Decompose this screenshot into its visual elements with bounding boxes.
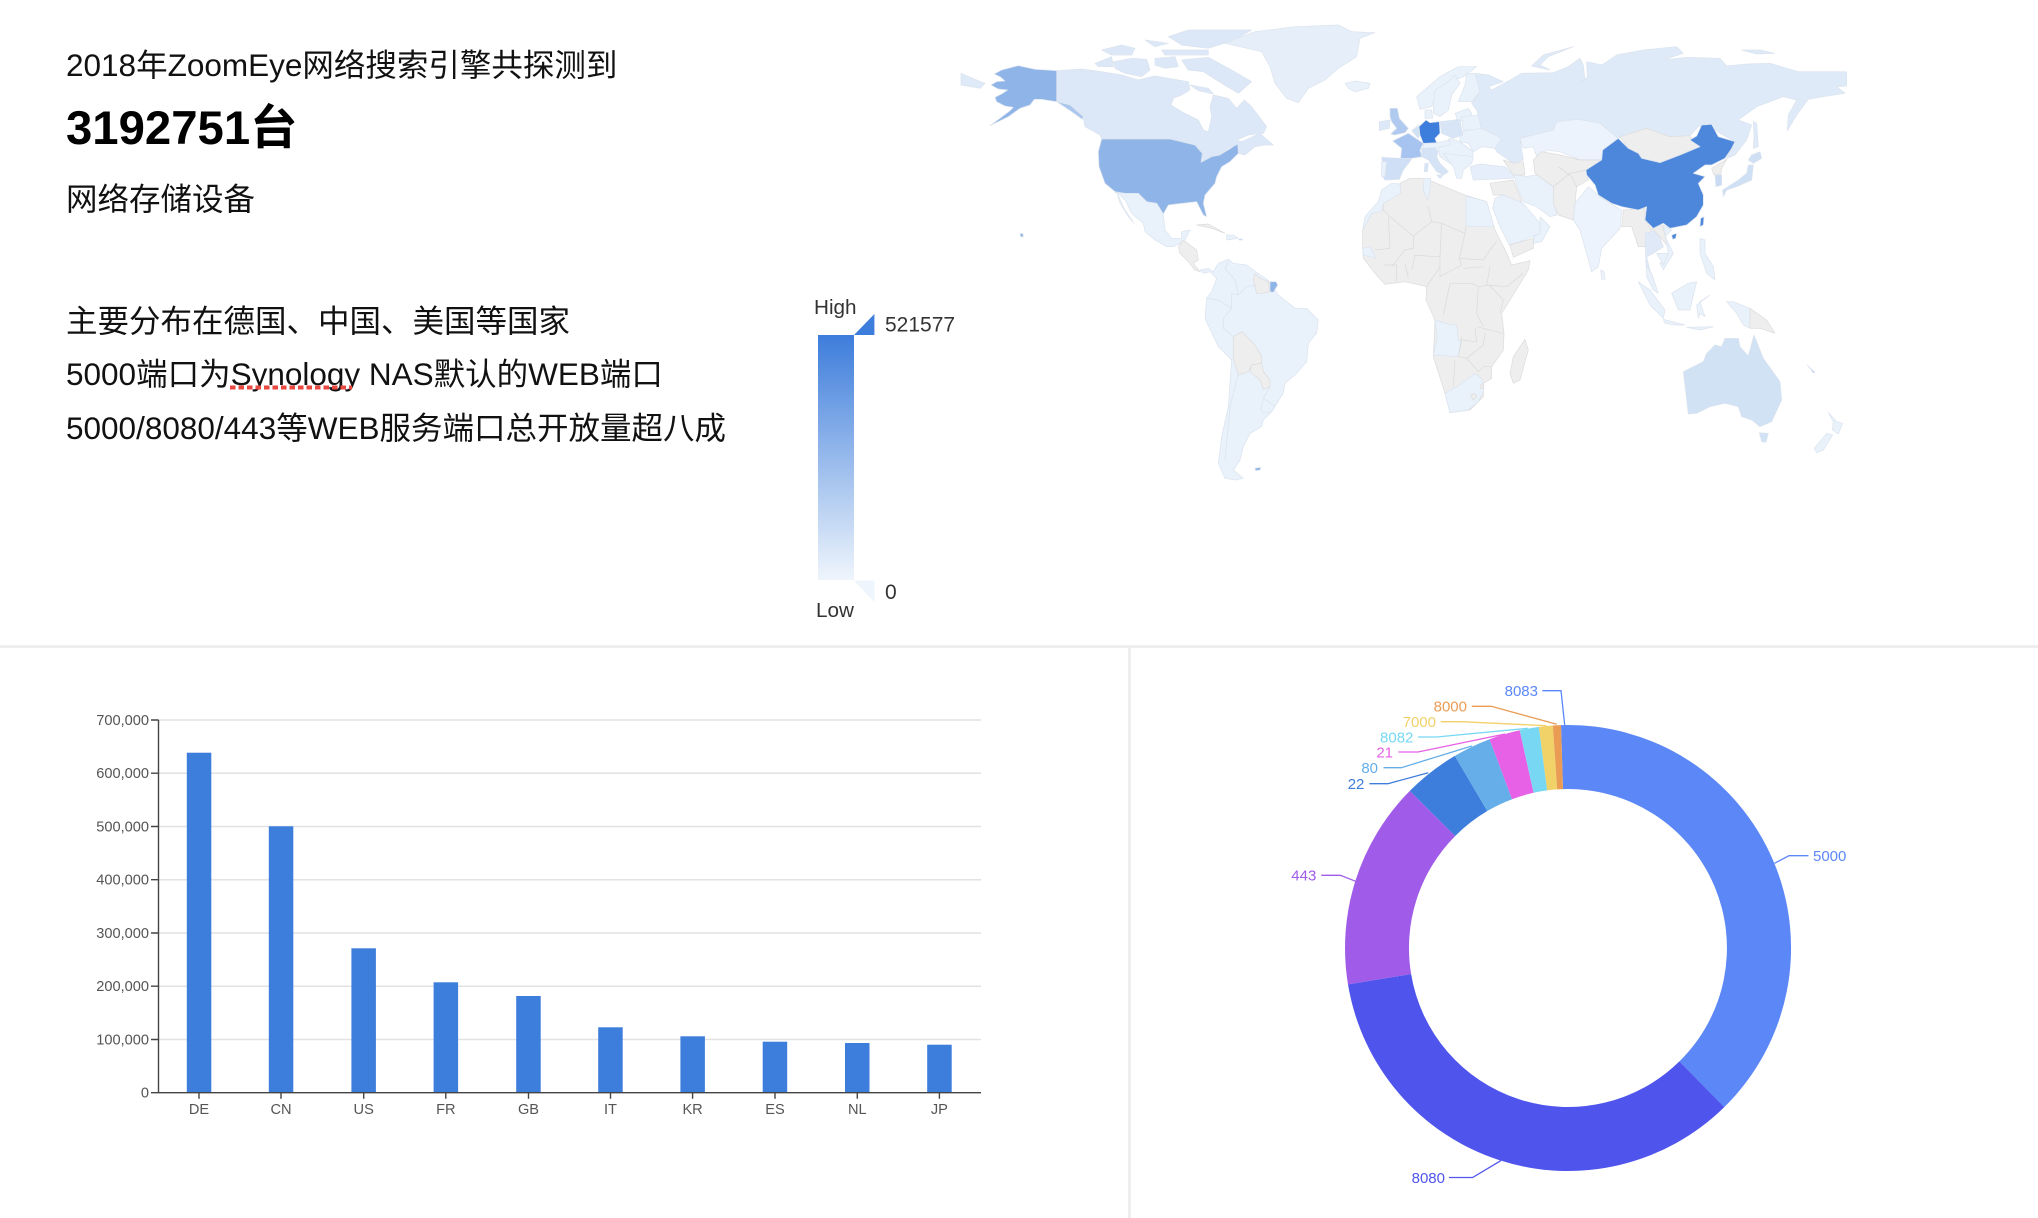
bar chart axes	[151, 720, 981, 1099]
legend gradient bar	[818, 335, 854, 580]
text: synology port note: 5000端口为Synology NAS默认的WEB端口	[66, 356, 663, 392]
label 8082: 8082	[1380, 729, 1413, 746]
country: myanmar	[1622, 208, 1652, 247]
bar chart gridlines	[158, 720, 981, 1040]
legend low handle	[854, 580, 874, 602]
heading: detected intro line: 2018年ZoomEye网络搜索引擎共探测到	[66, 47, 617, 83]
slice 8082	[1520, 727, 1547, 793]
slice 22	[1410, 756, 1487, 836]
bar chart: top countries	[96, 713, 981, 1118]
bar chart y axis labels	[96, 713, 149, 1102]
legend: visual map	[814, 296, 955, 622]
country: china	[1586, 124, 1735, 228]
bar chart x axis labels: NL	[848, 1102, 867, 1118]
label 8083	[1505, 683, 1565, 725]
map: south america	[1178, 240, 1318, 480]
slice 80	[1455, 739, 1512, 811]
country: usa	[1098, 139, 1238, 217]
country: russia	[1472, 47, 1847, 163]
country: australia	[1683, 335, 1782, 427]
map: oceania	[1638, 282, 1843, 453]
label 80	[1361, 746, 1472, 777]
label 80: 80	[1361, 760, 1378, 777]
label 5000: 5000	[1813, 848, 1846, 865]
slice 8000	[1553, 725, 1563, 789]
country: italy	[1422, 146, 1448, 175]
caucasus	[1503, 160, 1525, 175]
text: distribution note: 主要分布在德国、中国、美国等国家	[66, 303, 570, 339]
legend high label: High	[814, 296, 857, 319]
country: south korea	[1715, 175, 1722, 187]
country: canada	[1057, 69, 1273, 162]
bar chart y axis labels: 100,000	[96, 1032, 149, 1048]
label 8083: 8083	[1505, 683, 1538, 700]
map: north america	[961, 25, 1375, 247]
central asia	[1533, 152, 1602, 220]
spell-check underline	[230, 386, 352, 390]
label 22	[1348, 773, 1428, 793]
bar chart x axis labels: GB	[518, 1102, 539, 1118]
bar chart x axis labels: FR	[436, 1102, 456, 1118]
bar chart x axis labels: IT	[604, 1102, 617, 1118]
donut labels	[1291, 683, 1846, 1187]
bar chart y axis labels: 200,000	[96, 979, 149, 995]
bar chart x axis labels: DE	[189, 1102, 209, 1118]
label 443: 443	[1291, 868, 1316, 885]
label 443	[1291, 868, 1356, 885]
label 22: 22	[1348, 776, 1364, 793]
map: europe	[1379, 67, 1513, 180]
slice 5000	[1561, 725, 1791, 1107]
map: asia	[1472, 47, 1847, 293]
label 7000	[1403, 714, 1546, 731]
country: mongolia	[1620, 128, 1700, 163]
country: kazakhstan	[1520, 119, 1618, 160]
country: alaska	[990, 66, 1057, 126]
legend min value: 0	[885, 581, 897, 604]
slice 8080	[1348, 974, 1724, 1171]
label 8080	[1412, 1161, 1501, 1187]
country: uk	[1390, 108, 1408, 135]
country: mexico	[1115, 192, 1190, 247]
country: india	[1573, 187, 1622, 272]
legend low label: Low	[816, 599, 854, 622]
bar chart x axis labels: US	[354, 1102, 374, 1118]
world map	[961, 25, 1847, 480]
label 21: 21	[1376, 744, 1393, 761]
label 7000: 7000	[1403, 714, 1436, 731]
heading: device total: 3192751台	[66, 102, 297, 155]
donut chart: ports	[1291, 683, 1846, 1187]
country: japan	[1748, 152, 1762, 163]
label 8080: 8080	[1412, 1170, 1445, 1187]
bar chart y axis labels: 700,000	[96, 713, 149, 729]
bar chart x axis labels	[189, 1102, 948, 1118]
legend max value: 521577	[885, 314, 955, 336]
country: greenland	[1225, 25, 1375, 103]
map: africa and middle east	[1363, 173, 1557, 413]
country: spain	[1382, 157, 1412, 180]
bar chart y axis labels: 0	[141, 1086, 149, 1102]
text: web port share note: 5000/8080/443等WEB服务端口总开放量超八成	[66, 410, 726, 446]
label 5000	[1774, 848, 1846, 865]
country: france	[1393, 133, 1423, 158]
country: austria and switzerland	[1423, 140, 1450, 148]
country: iceland	[1345, 81, 1370, 92]
bar chart bars	[187, 753, 952, 1093]
bar chart y axis labels: 500,000	[96, 820, 149, 836]
bar chart x axis labels: KR	[682, 1102, 703, 1118]
country: north korea	[1712, 159, 1727, 175]
legend high handle	[854, 314, 874, 335]
slice 21	[1490, 730, 1534, 799]
country: new zealand	[1828, 413, 1843, 434]
country: germany	[1419, 120, 1440, 143]
label 8000	[1434, 698, 1557, 724]
bar chart y axis labels: 300,000	[96, 926, 149, 942]
label 21	[1376, 734, 1505, 761]
slice 7000	[1539, 726, 1557, 790]
bar chart x axis labels: CN	[270, 1102, 292, 1118]
heading: device type: 网络存储设备	[66, 181, 255, 217]
country: poland	[1440, 119, 1463, 138]
label 8082	[1380, 728, 1528, 746]
bar chart x axis labels: JP	[931, 1102, 948, 1118]
bar chart y axis labels: 600,000	[96, 766, 149, 782]
bar chart x axis labels: ES	[765, 1102, 785, 1118]
slice 443	[1345, 791, 1455, 984]
label 8000: 8000	[1434, 698, 1467, 716]
southeast asia	[1645, 230, 1663, 273]
bar chart y axis labels: 400,000	[96, 873, 149, 889]
